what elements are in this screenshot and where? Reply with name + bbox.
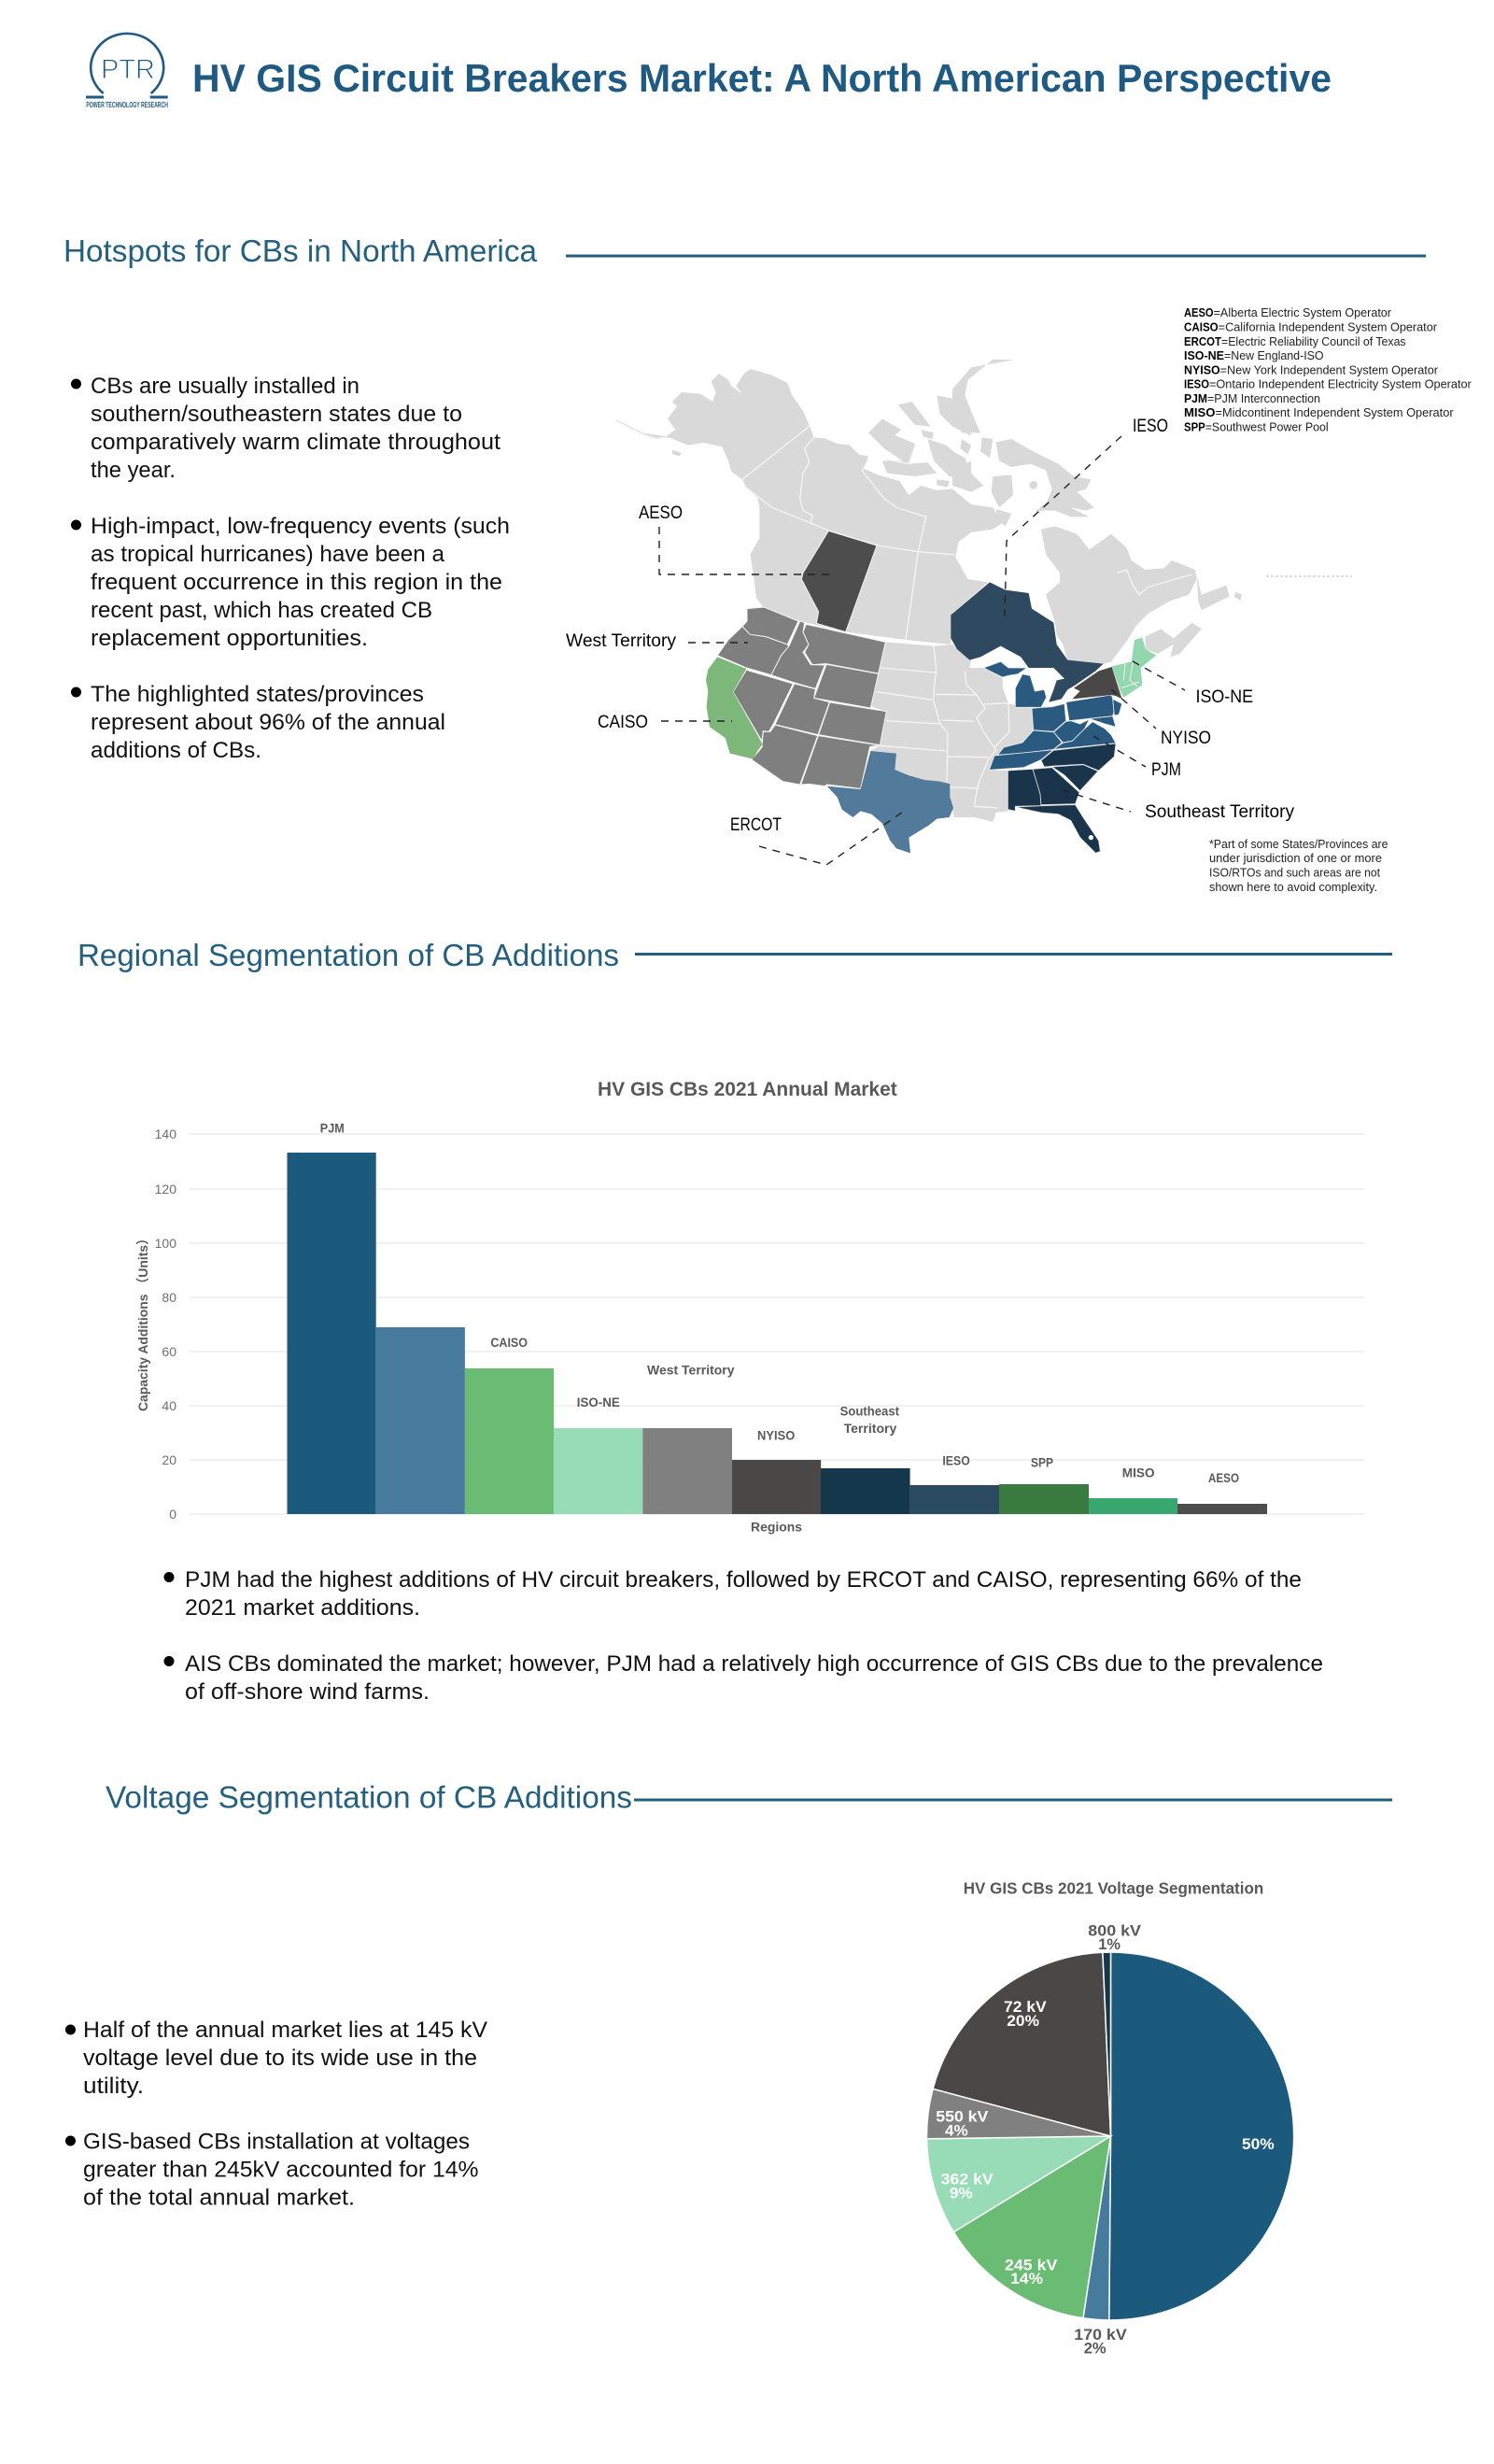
heading: regional segmentation — [78, 938, 1392, 972]
Ontario — [951, 582, 1104, 702]
y axis ticks: 40 — [162, 1398, 176, 1413]
y axis ticks: 140 — [155, 1126, 176, 1141]
text block: voltage bullets: Half of the annual market lies at 145 kV — [83, 2018, 488, 2043]
pie labels: 362 kV — [941, 2171, 994, 2188]
map labels: NYISO — [1161, 729, 1211, 748]
pie labels: 550 kV — [936, 2108, 989, 2126]
text block: hotspot bullets: additions of CBs. — [91, 738, 261, 763]
text block: hotspot bullets: CBs are usually installed in — [91, 374, 359, 399]
chart title: HV GIS CBs 2021 Annual Market — [598, 1079, 897, 1100]
legend: abbreviations: ERCOT — [1184, 335, 1221, 348]
map labels — [566, 417, 1294, 835]
text block: voltage bullets: of the total annual market. — [83, 2186, 355, 2210]
text block: voltage bullets: voltage level due to its wide use in the — [83, 2046, 477, 2071]
legend: abbreviations: =California Independent System Operator — [1219, 321, 1437, 334]
legend: abbreviations: =Midcontinent Independent System Operator — [1216, 406, 1454, 419]
text block: hotspot bullets: frequent occurrence in this region in the — [91, 570, 502, 595]
text block: hotspot bullets — [71, 374, 510, 763]
pie labels: 20% — [1007, 2012, 1039, 2030]
map labels: IESO — [1133, 417, 1168, 436]
West Territory states — [717, 607, 886, 788]
text block: regional bullets: AIS CBs dominated the market; however, PJM had a relatively high occurrence of GIS CBs due to the prevalence — [185, 1651, 1323, 1677]
bar labels — [320, 1121, 1239, 1535]
text block: hotspot bullets: replacement opportunities. — [91, 626, 368, 651]
y axis ticks: 20 — [162, 1452, 176, 1467]
bar labels: ISO-NE — [577, 1395, 620, 1409]
legend: abbreviations: PJM — [1184, 392, 1207, 405]
text block: regional bullets: 2021 market additions. — [185, 1595, 420, 1621]
bars — [288, 1153, 1267, 1514]
logo: PTR Power Technology Research: POWER TECHNOLOGY RESEARCH — [86, 100, 168, 109]
eastern Canada and Arctic — [952, 360, 1242, 664]
text block: regional bullets: PJM had the highest additions of HV circuit breakers, followed by ERCOT and CAISO, representing 66% of the — [185, 1567, 1302, 1593]
bar labels: IESO — [942, 1454, 970, 1468]
heading: voltage segmentation — [106, 1780, 1392, 1814]
pie labels: 50% — [1242, 2135, 1275, 2153]
bar labels: SPP — [1031, 1456, 1053, 1470]
heading: voltage segmentation: Voltage Segmentation of CB Additions — [106, 1780, 632, 1814]
text block: voltage bullets: GIS-based CBs installation at voltages — [83, 2130, 470, 2154]
y axis title: Capacity Additions （Units） — [135, 1232, 150, 1411]
Southeast Territory states — [1008, 743, 1116, 853]
bar chart: 2021 annual market by region — [135, 1079, 1364, 1535]
legend: abbreviations: IESO — [1184, 377, 1209, 390]
legend: abbreviations: =Electric Reliability Council of Texas — [1221, 335, 1406, 348]
text block: hotspot bullets: southern/southeastern states due to — [91, 402, 462, 427]
map labels: Southeast Territory — [1145, 802, 1294, 822]
heading: hotspots — [63, 234, 1426, 268]
text block: hotspot bullets: recent past, which has created CB — [91, 598, 432, 623]
pie labels: 72 kV — [1004, 1998, 1047, 2016]
legend: abbreviations — [1184, 306, 1472, 433]
legend: abbreviations: ISO-NE — [1184, 349, 1224, 362]
text block: hotspot bullets: as tropical hurricanes) have been a — [91, 542, 444, 567]
legend: abbreviations: =PJM Interconnection — [1207, 392, 1320, 405]
bar labels: PJM — [320, 1121, 345, 1135]
pie chart: voltage segmentation — [926, 1879, 1294, 2357]
bar labels: Regions — [751, 1521, 802, 1535]
legend: abbreviations: AESO — [1184, 306, 1214, 319]
map labels: AESO — [639, 503, 683, 523]
legend: abbreviations: =Southwest Power Pool — [1205, 420, 1329, 433]
pie labels: 245 kV — [1005, 2257, 1058, 2273]
pie labels: 800 kV — [1088, 1922, 1142, 1940]
map labels: West Territory — [566, 631, 676, 651]
New England — [1112, 638, 1156, 698]
bar labels: West Territory — [647, 1363, 735, 1377]
logo: PTR Power Technology Research: PTR — [101, 54, 155, 85]
central United States — [706, 607, 1034, 853]
pie labels: 4% — [945, 2121, 968, 2139]
footnote — [1209, 837, 1388, 894]
legend: abbreviations: =New England-ISO — [1224, 349, 1324, 362]
title: HV GIS Circuit Breakers Market: A North American Perspective — [192, 56, 1332, 100]
text block: voltage bullets: utility. — [83, 2074, 144, 2099]
bar labels: AESO — [1208, 1471, 1239, 1485]
y axis ticks: 0 — [169, 1507, 176, 1522]
text block: hotspot bullets: The highlighted states/provinces — [91, 682, 424, 707]
leader lines — [659, 436, 1185, 865]
bar labels: MISO — [1122, 1466, 1155, 1480]
pie labels: 14% — [1010, 2270, 1043, 2287]
footnote: *Part of some States/Provinces are — [1209, 837, 1388, 851]
map: North America hotspots — [566, 360, 1352, 865]
legend: abbreviations: =Ontario Independent Electricity System Operator — [1209, 377, 1472, 390]
pie labels — [936, 1922, 1275, 2357]
California — [706, 657, 763, 759]
footnote: under jurisdiction of one or more — [1209, 851, 1382, 865]
map labels: CAISO — [598, 713, 648, 732]
pie labels: 1% — [1098, 1935, 1120, 1953]
y axis ticks: 100 — [155, 1236, 176, 1251]
legend: abbreviations: =Alberta Electric System Operator — [1214, 306, 1391, 319]
text block: regional bullets: of off-shore wind farms. — [185, 1679, 430, 1705]
pie labels: 9% — [950, 2185, 973, 2202]
legend: abbreviations: MISO — [1184, 406, 1216, 419]
bar labels: Territory — [844, 1422, 897, 1436]
map labels: PJM — [1151, 760, 1181, 780]
footnote: ISO/RTOs and such areas are not — [1209, 866, 1380, 880]
text block: voltage bullets: greater than 245kV accounted for 14% — [83, 2158, 478, 2182]
bar labels: CAISO — [490, 1336, 528, 1350]
text block: hotspot bullets: the year. — [91, 458, 176, 483]
Nova Scotia and New Brunswick — [1146, 623, 1202, 657]
heading: regional segmentation: Regional Segmentation of CB Additions — [78, 938, 619, 972]
logo: PTR Power Technology Research — [86, 34, 168, 109]
y axis ticks: 120 — [155, 1182, 176, 1197]
legend: abbreviations: =New York Independent System Operator — [1220, 364, 1438, 377]
legend: abbreviations: SPP — [1184, 420, 1205, 433]
bar labels: Southeast — [840, 1405, 899, 1418]
y axis ticks: 60 — [162, 1344, 176, 1359]
western Canada and Alaska — [616, 369, 1002, 644]
pie slices — [926, 1952, 1294, 2320]
New York — [1072, 667, 1122, 699]
Alberta — [801, 531, 877, 632]
text block: voltage bullets — [65, 2018, 488, 2210]
text block: hotspot bullets: comparatively warm climate throughout — [91, 430, 500, 455]
PJM states — [983, 661, 1122, 770]
map labels: ERCOT — [730, 815, 782, 835]
y axis ticks — [155, 1126, 176, 1522]
legend: abbreviations: NYISO — [1184, 364, 1220, 377]
y axis ticks: 80 — [162, 1290, 176, 1305]
text block: hotspot bullets: represent about 96% of the annual — [91, 710, 445, 735]
legend: abbreviations: CAISO — [1184, 321, 1219, 334]
text block: hotspot bullets: High-impact, low-frequency events (such — [91, 514, 510, 539]
map labels: ISO-NE — [1195, 687, 1253, 707]
eastern United States and Ontario — [951, 582, 1202, 853]
pie labels: 2% — [1084, 2339, 1106, 2357]
bar labels: NYISO — [757, 1429, 795, 1443]
pie labels: 170 kV — [1074, 2326, 1127, 2344]
heading: hotspots: Hotspots for CBs in North America — [63, 234, 538, 268]
footnote: shown here to avoid complexity. — [1209, 880, 1377, 894]
pie title: HV GIS CBs 2021 Voltage Segmentation — [964, 1879, 1263, 1898]
Texas — [827, 751, 953, 853]
text block: regional bullets — [164, 1567, 1323, 1705]
